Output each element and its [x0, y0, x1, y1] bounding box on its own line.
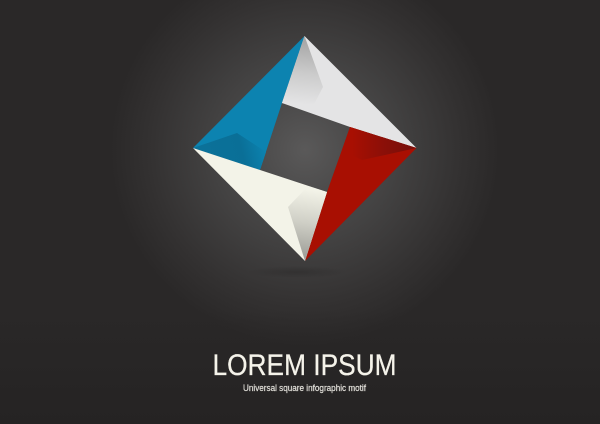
title: LOREM IPSUM: [212, 349, 396, 382]
lower dark fade: [0, 310, 600, 424]
red fold: [342, 127, 416, 160]
center square: [260, 103, 350, 192]
ground shadow: [247, 266, 347, 278]
panel: blue: [193, 36, 304, 170]
panel: cream: [193, 148, 327, 261]
subtitle: Universal square infographic motif: [243, 383, 366, 393]
blue fold: [193, 133, 266, 170]
white fold: [282, 36, 323, 108]
diamond logo: [193, 36, 416, 261]
panel: white: [282, 36, 416, 148]
panel: red: [305, 127, 416, 261]
cream fold: [288, 186, 327, 261]
